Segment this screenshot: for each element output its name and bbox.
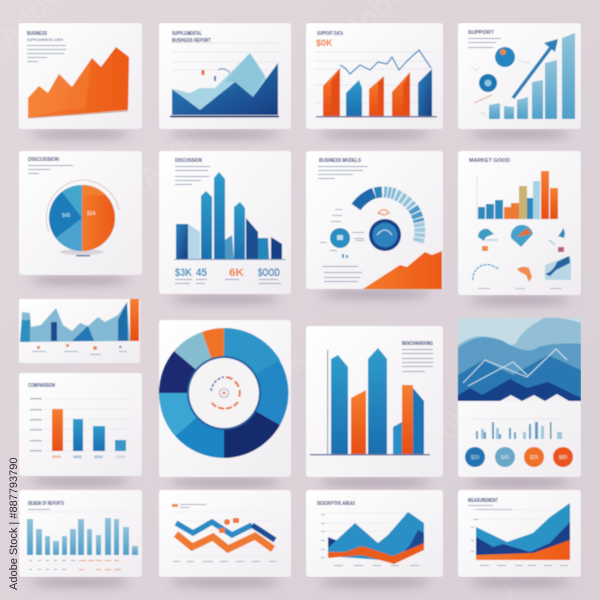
panel: mountain landscape with circles (458, 318, 581, 477)
orange ribbon (176, 534, 273, 549)
stat numbers: $OOD (258, 267, 280, 279)
stat circle 3: $25 (530, 455, 538, 461)
arrow (513, 39, 558, 98)
panel: pie chart (19, 151, 142, 275)
panel: tall arrow bars (306, 326, 443, 477)
panel: layered area chart (306, 490, 443, 577)
heading: SUPPORT (468, 30, 494, 36)
axis labels (471, 519, 568, 566)
icons (219, 518, 239, 533)
panel: donut chart (159, 320, 291, 477)
heading: SUPPORT DATA (317, 31, 343, 37)
bars (489, 33, 575, 119)
icon: orange mark (378, 210, 389, 215)
heading: BUSINESS MODELS (319, 158, 362, 164)
text block (468, 38, 501, 48)
bars (316, 68, 437, 118)
stat circle 3 (524, 447, 544, 467)
stat numbers (175, 267, 280, 279)
stat circle 2: $45 (501, 455, 509, 461)
big number: $0K (316, 38, 333, 48)
watermark: Adobe Stock (132, 42, 285, 195)
heading: DISCUSSION (28, 157, 59, 163)
stat numbers: $3K (175, 267, 192, 279)
axis labels (30, 398, 42, 452)
text block: SUPPLEMENTAL DATA (27, 38, 64, 42)
text block (318, 166, 368, 179)
area chart (170, 53, 279, 118)
panel: orange area chart (18, 23, 142, 129)
watermark: Stock (172, 514, 253, 595)
watermark: Stock (232, 344, 313, 425)
panel: ribbon line chart (159, 490, 291, 577)
line chart (340, 50, 431, 74)
watermark: Adobe (462, 166, 551, 255)
watermark: Adobe (402, 386, 491, 475)
axis (310, 350, 430, 456)
stat circle 1 (465, 447, 485, 467)
labels (320, 209, 364, 251)
heading: DESIGN OF REPORTS (28, 501, 64, 507)
bar labels: 2020 (52, 454, 62, 459)
legend (172, 504, 206, 508)
text block (175, 166, 210, 185)
text block bottom (322, 266, 362, 282)
heading: MARKET GOOD (469, 158, 510, 164)
pie: $45 (62, 213, 71, 219)
stock credit: Adobe Stock | #887793790 (8, 457, 20, 590)
stat circle 2 (495, 447, 515, 467)
icon captions (478, 288, 562, 289)
bar labels (52, 454, 126, 459)
axis labels (173, 561, 276, 562)
caption (76, 255, 90, 256)
heading: BUSINESS (27, 31, 48, 37)
panel: bar chart with orange (19, 373, 142, 476)
icon: center ring (211, 377, 240, 409)
area chart (328, 512, 424, 564)
heading: DISCUSSION (175, 158, 202, 164)
icon: globe (495, 47, 515, 67)
axis labels (321, 514, 419, 566)
icon marks (202, 69, 231, 81)
white line chart (463, 349, 567, 383)
panel: wide area strip (19, 299, 140, 363)
mini bars (476, 422, 562, 439)
bar labels: 2022 (94, 454, 104, 459)
heading: DESCRIPTIVE AREAS (317, 501, 355, 507)
stat circle 4 (553, 447, 573, 467)
card shadows (30, 130, 570, 586)
panel: blue mountain chart (159, 23, 291, 129)
axis labels (29, 560, 75, 570)
stat numbers: 45 (196, 267, 207, 279)
bars (27, 518, 138, 555)
gauge arc (356, 192, 420, 243)
stat icons (37, 344, 97, 350)
pie: $14 (87, 211, 96, 217)
icon: central dial (369, 219, 401, 251)
text block (28, 165, 73, 174)
heading: SUPPLEMENTAL (172, 31, 202, 37)
pie (46, 180, 119, 255)
heading: BENCHMARKING (402, 341, 433, 347)
area chart (20, 299, 139, 342)
area chart (28, 47, 129, 118)
stat labels (32, 351, 127, 355)
heading: MEASUREMENT (468, 498, 498, 504)
blue ribbon (176, 522, 275, 540)
panel: bars and icons (458, 151, 581, 295)
panel: gauge (306, 151, 443, 289)
stat numbers: 6K (229, 267, 244, 279)
icon grid (473, 225, 571, 282)
panel: growth arrow chart (458, 23, 581, 129)
bars (174, 172, 286, 260)
area chart (476, 503, 570, 560)
panel: bars with line (306, 23, 443, 129)
panel: stacked area chart (458, 490, 581, 577)
bar chart (477, 171, 558, 219)
bar labels: 2021 (73, 454, 83, 459)
stat circle 1: $20 (471, 455, 479, 461)
orange corner area (363, 251, 442, 289)
subheading: BUSINESS REPORT (172, 38, 211, 44)
panel: tall blue bars (159, 151, 291, 294)
stat captions (175, 279, 281, 284)
donut (159, 328, 288, 458)
stat circle 4: $80 (559, 455, 567, 461)
bar labels: 2023 (116, 454, 126, 459)
bars (52, 409, 126, 451)
icon: small bars (342, 254, 348, 258)
mountain layers (458, 318, 581, 401)
icon: circle (479, 74, 497, 92)
heading: COMPARISON (28, 383, 55, 389)
bars (331, 348, 424, 454)
panel: monthly bars (19, 490, 142, 577)
icon: left circle (330, 228, 350, 248)
text block (402, 349, 433, 372)
